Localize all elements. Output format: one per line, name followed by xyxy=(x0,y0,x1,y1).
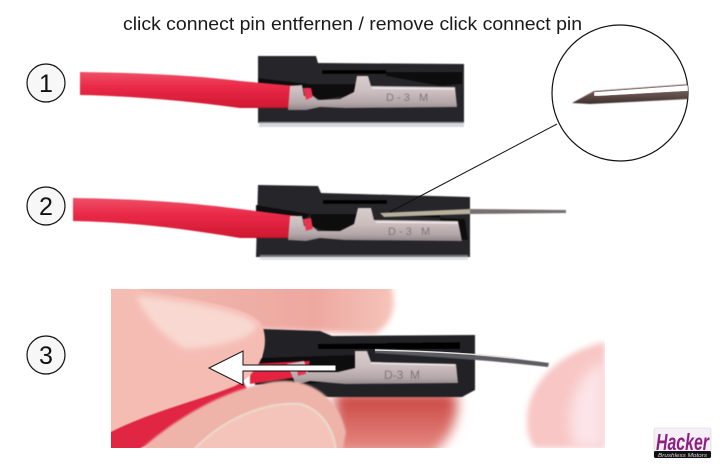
step 2 photo: connector with pin inserted xyxy=(73,185,566,260)
terminal 2: D - 3 M xyxy=(388,226,430,238)
pin 2 xyxy=(380,209,566,217)
step 1 number badge xyxy=(27,64,65,102)
removal direction arrow xyxy=(209,351,336,385)
leader line to magnifier xyxy=(390,124,557,212)
terminal 3 xyxy=(287,351,458,385)
terminal 1 xyxy=(288,76,457,110)
red wire 1 xyxy=(80,72,296,108)
step 1 photo: connector with wire xyxy=(80,56,464,127)
Hacker logo xyxy=(654,428,711,459)
red wire inside terminal xyxy=(250,361,310,384)
lower finger xyxy=(138,381,346,452)
reddish shadow under connector xyxy=(335,392,457,455)
title: click connect pin entfernen / remove click connect pin xyxy=(123,14,582,34)
step 2 number badge xyxy=(27,187,65,225)
pin tip xyxy=(572,84,689,104)
step 3 photo: fingers removing terminal with pin xyxy=(111,289,605,448)
magnifier circle: pin tip detail xyxy=(552,25,689,161)
connector housing 1 xyxy=(258,56,464,127)
thumb xyxy=(105,285,265,432)
right fingertip xyxy=(527,342,605,448)
step 3 number badge: 3 xyxy=(39,342,53,370)
step 3 number badge xyxy=(27,336,65,374)
lower fingernail xyxy=(192,404,336,452)
connector housing 2 xyxy=(256,185,470,260)
step 1 number badge: 1 xyxy=(39,70,53,98)
terminal 3: D-3 M xyxy=(384,368,420,382)
pin 3 xyxy=(375,349,549,367)
terminal 1: D - 3 M xyxy=(386,92,428,104)
terminal 2 xyxy=(288,208,462,241)
step 2 number badge: 2 xyxy=(39,193,53,221)
connector housing 3 xyxy=(255,329,475,397)
red wire 2 xyxy=(73,198,296,238)
Hacker logo: Brushless Motors xyxy=(658,453,707,459)
thumbnail xyxy=(137,296,256,349)
red wire 3 xyxy=(111,380,248,448)
upper finger xyxy=(135,289,397,336)
